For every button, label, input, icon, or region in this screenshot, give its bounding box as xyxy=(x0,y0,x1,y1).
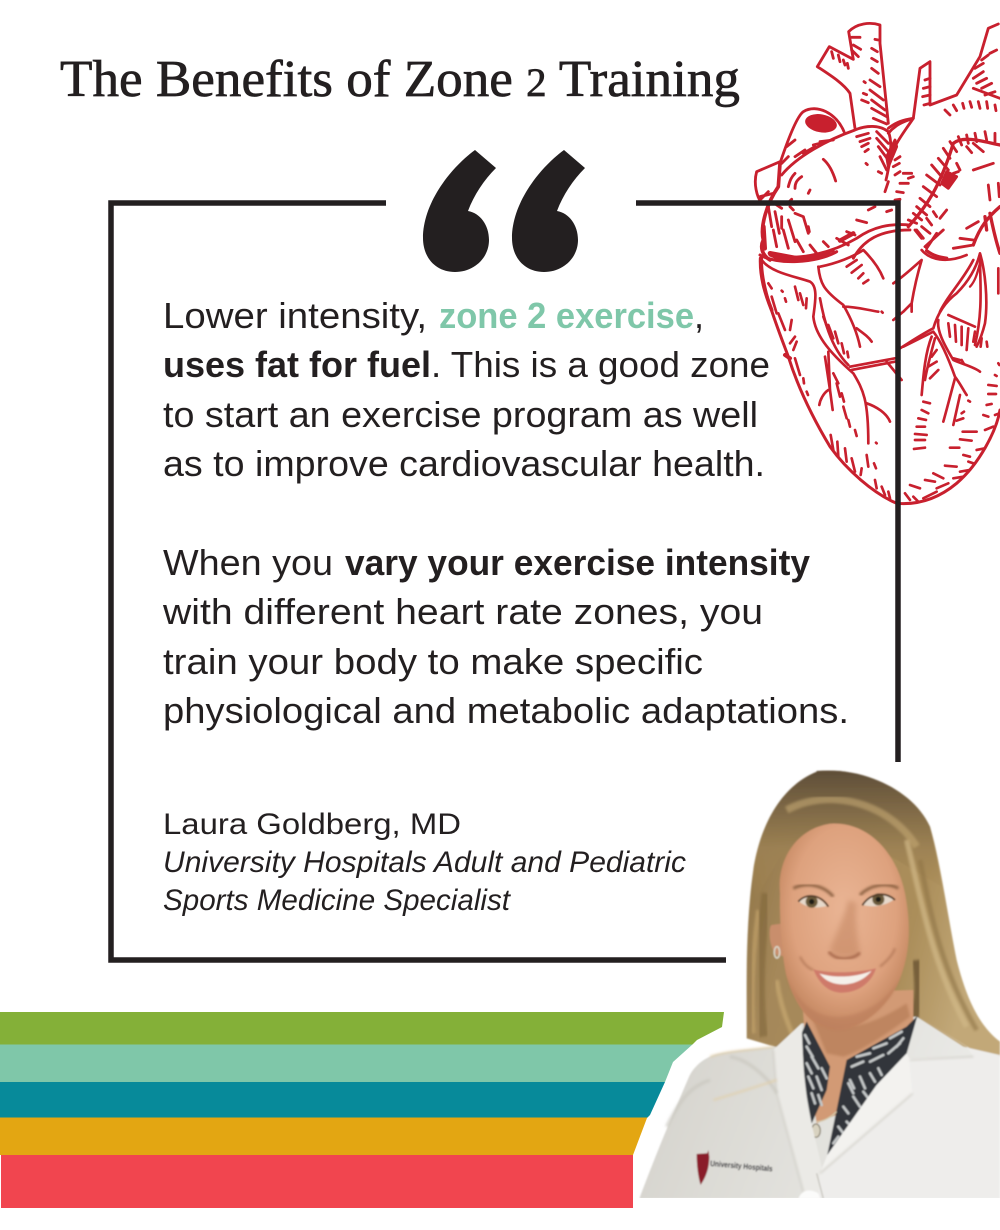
face xyxy=(770,823,909,1030)
text block: second paragraph: vary your exercise intensity xyxy=(345,542,810,583)
text block: second paragraph xyxy=(162,542,849,731)
hair xyxy=(747,770,1000,1057)
text block: second paragraph: When you xyxy=(163,542,333,583)
attribution: University Hospitals Adult and Pediatric xyxy=(163,846,686,879)
necklace xyxy=(812,1112,837,1137)
text block: first paragraph: as to improve cardiovascular health. xyxy=(163,443,765,484)
text block: first paragraph: , xyxy=(694,295,704,336)
coat logo: University Hospitals xyxy=(710,1159,773,1173)
text block: first paragraph: zone 2 exercise xyxy=(439,295,694,336)
earring xyxy=(774,947,780,958)
zone colour stripes xyxy=(0,1012,741,1208)
heart illustration xyxy=(755,23,1000,504)
coat xyxy=(639,1017,1000,1199)
text block: second paragraph: with different heart rate zones, you xyxy=(162,591,763,632)
quote frame xyxy=(111,203,898,960)
text block: first paragraph: . This is a good zone xyxy=(431,344,770,385)
neck and chest xyxy=(802,990,913,1123)
heart upper half xyxy=(755,23,1000,260)
text block: second paragraph: physiological and metabolic adaptations. xyxy=(163,690,849,731)
portrait of Laura Goldberg xyxy=(639,770,1000,1199)
text block: first paragraph: to start an exercise program as well xyxy=(163,394,758,435)
coat logo xyxy=(697,1150,773,1185)
text block: first paragraph: Lower intensity, xyxy=(163,295,427,336)
attribution: Sports Medicine Specialist xyxy=(163,884,512,917)
attribution xyxy=(163,808,686,917)
text block: second paragraph: train your body to make specific xyxy=(163,641,703,682)
blouse xyxy=(802,1016,917,1155)
coat lapels xyxy=(664,1024,972,1198)
title: The Benefits of Zone 2 Training xyxy=(60,51,740,108)
text block: first paragraph xyxy=(163,295,770,484)
heart lower half xyxy=(760,250,1000,504)
text block: first paragraph: uses fat for fuel xyxy=(163,344,431,385)
attribution: Laura Goldberg, MD xyxy=(163,808,461,841)
icon: quotation marks xyxy=(423,150,585,272)
